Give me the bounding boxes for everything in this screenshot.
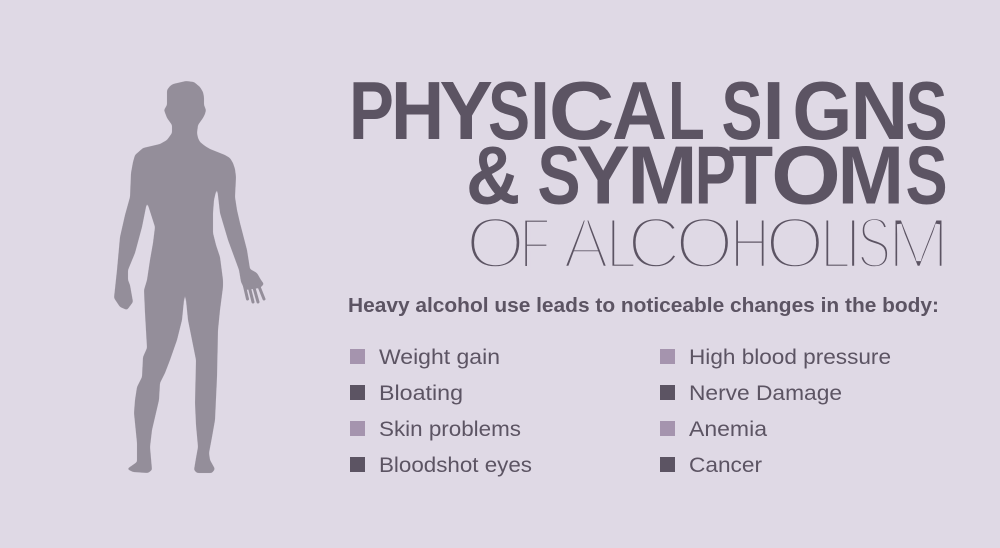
title: line one: L bbox=[668, 64, 704, 157]
item: skin problems: Skin problems bbox=[379, 418, 521, 441]
item: anemia: Anemia bbox=[689, 418, 767, 441]
title: line three: H bbox=[730, 204, 770, 284]
title: line two: T bbox=[729, 128, 773, 222]
title: line one: S bbox=[488, 64, 530, 157]
title: line one: H bbox=[391, 64, 444, 157]
title: line two: O bbox=[771, 128, 841, 222]
title: line two: S bbox=[537, 128, 581, 222]
item: bloating bbox=[350, 382, 463, 405]
title: line one: S bbox=[722, 64, 762, 157]
item: cancer: Cancer bbox=[689, 454, 762, 477]
title: line one: I bbox=[762, 64, 785, 157]
title: line one: G bbox=[792, 64, 852, 157]
title: line two: P bbox=[695, 128, 736, 222]
title: line one: P bbox=[349, 64, 394, 157]
title: line three: O bbox=[675, 204, 734, 284]
title: line one: S bbox=[906, 64, 948, 157]
list: left column bbox=[350, 346, 532, 477]
title: line one: A bbox=[612, 64, 667, 157]
title: line two: Y bbox=[576, 128, 630, 222]
list: right column bbox=[660, 346, 891, 477]
item: weight gain: Weight gain bbox=[379, 346, 500, 369]
title: line three: C bbox=[627, 204, 681, 284]
title: line one: C bbox=[549, 64, 615, 157]
title: line two: M bbox=[838, 128, 904, 222]
title: line two: S bbox=[906, 128, 948, 222]
title: line three: O bbox=[466, 204, 525, 284]
item: bloodshot eyes: Bloodshot eyes bbox=[379, 454, 532, 477]
title: line three: I bbox=[844, 204, 862, 284]
title: line three: S bbox=[857, 204, 891, 284]
title: line one: N bbox=[850, 64, 908, 157]
item: bloating: Bloating bbox=[379, 382, 463, 405]
title: line three: O bbox=[765, 204, 825, 284]
title: line three: F bbox=[520, 204, 550, 284]
title: line three: L bbox=[606, 204, 637, 284]
item: high blood pressure: High blood pressure bbox=[689, 346, 891, 369]
title: line two: & bbox=[466, 128, 520, 222]
title: line three: M bbox=[887, 204, 950, 284]
title: line one: Y bbox=[440, 64, 493, 157]
title: line three: A bbox=[563, 204, 609, 284]
item: cancer bbox=[660, 454, 762, 477]
item: anemia bbox=[660, 418, 767, 441]
title: line three: L bbox=[820, 204, 851, 284]
title: line one: I bbox=[530, 64, 550, 157]
subtitle: Heavy alcohol use leads to noticeable changes in the body: bbox=[348, 295, 939, 317]
title: line two: M bbox=[627, 128, 698, 222]
item: nerve damage: Nerve Damage bbox=[689, 382, 842, 405]
icon: human body silhouette bbox=[114, 81, 264, 473]
